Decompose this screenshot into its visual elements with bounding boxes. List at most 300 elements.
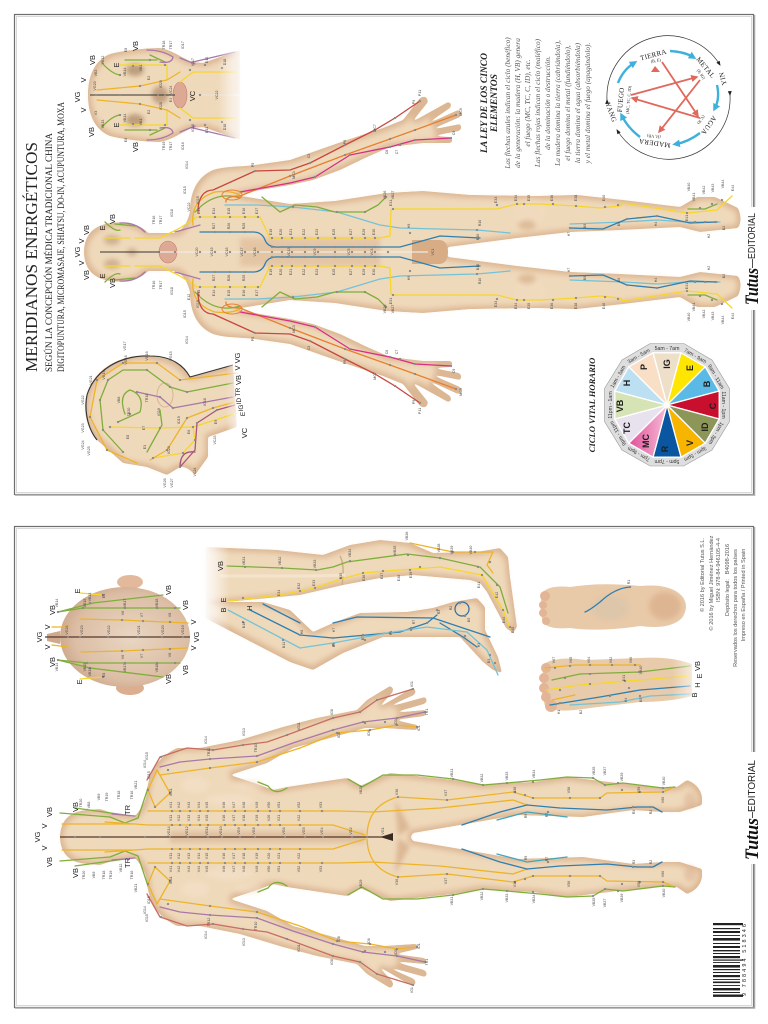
- labels: top view of head: V: [43, 644, 52, 650]
- labels: back body: V22: [297, 853, 301, 859]
- labels: back body: V13: [187, 815, 191, 821]
- labels: front head view: VC24: [169, 86, 173, 94]
- labels: back body: R2: [649, 860, 653, 864]
- labels: back body: V52: [297, 802, 301, 808]
- labels: front body: E33: [494, 301, 498, 307]
- top view of head, back sheet: [45, 575, 190, 695]
- labels: back body: VB34: [532, 770, 536, 778]
- labels: lateral head: E9: [214, 420, 218, 424]
- block: ley de los cinco elementos: ELEMENTOS: [490, 74, 500, 133]
- labels: back body: V60: [661, 797, 665, 803]
- labels: back body: IG11: [297, 722, 301, 730]
- labels: back body: IG11: [297, 944, 301, 952]
- labels: front head view: E8: [124, 48, 128, 52]
- labels: back body: TR: [123, 857, 132, 868]
- labels: back body: VB35: [592, 898, 596, 906]
- labels: lateral head: VG16: [145, 351, 149, 361]
- copyright text block: © 2016 by Editorial Tutus S.L.: [699, 538, 706, 612]
- labels: front body: C3: [307, 154, 311, 158]
- copyright text block: Impreso en España / Printed in Spain: [741, 549, 747, 641]
- labels: top view of head: VB17: [123, 664, 127, 672]
- labels: legs side view: E37: [380, 573, 384, 579]
- title: SEGÚN LA CONCEPCIÓN MÉDICA TRADICIONAL CHINA: [43, 133, 55, 372]
- labels: legs side view: E41: [477, 582, 481, 588]
- labels: legs side view: H3: [477, 643, 481, 647]
- labels: front body: IG18: [170, 209, 174, 217]
- labels: back body: R7: [545, 813, 549, 817]
- five elements cycle diagram: (H, VB): [646, 132, 661, 140]
- labels: back body: VB8: [87, 802, 91, 808]
- labels: front body: VC9: [313, 248, 317, 256]
- meridian lines: lower half of front: [105, 257, 732, 403]
- clock wheel: E: [685, 365, 695, 371]
- labels: front body: B10: [476, 234, 480, 240]
- labels: front body: E14: [212, 290, 216, 296]
- labels: front body: B2: [722, 226, 726, 230]
- clock wheel: IG: [662, 359, 672, 369]
- labels: back body: V14: [197, 815, 201, 821]
- five elements cycle diagram: [604, 36, 730, 159]
- labels: front body: H2: [707, 266, 711, 270]
- labels: front body: C7: [395, 350, 399, 354]
- labels: top view of head: [35, 585, 201, 685]
- labels: top view of head: VG: [35, 631, 44, 642]
- clock wheel: 7pm - 9pm: [627, 445, 651, 462]
- labels: back body: TR19: [109, 871, 113, 879]
- labels: front body: MC3: [292, 325, 296, 333]
- labels: front body: R27: [212, 275, 216, 281]
- labels: front head view: VB: [87, 127, 96, 137]
- labels: back body: ID6: [367, 730, 371, 736]
- labels: back body: [33, 681, 666, 993]
- labels: back body: V: [40, 823, 49, 829]
- labels: lateral head: E: [240, 411, 247, 416]
- labels: back body: V41: [169, 866, 173, 872]
- clock wheel: [604, 344, 730, 466]
- copyright text block: © 2016 by Miguel Jiménez Hernández: [708, 535, 715, 630]
- labels: front body: R26: [227, 223, 231, 229]
- labels: back body: V38: [513, 787, 517, 793]
- labels: front body: H9: [407, 276, 411, 280]
- labels: back body: V51: [277, 866, 281, 872]
- labels: legs side view: B5: [467, 618, 471, 622]
- labels: front body: E16: [242, 290, 246, 296]
- labels: legs side view: H4: [389, 631, 393, 635]
- clock wheel: V: [685, 440, 695, 446]
- labels: top view of head: VB15: [83, 599, 87, 607]
- clock wheel: P: [639, 364, 649, 370]
- labels: back body: TR1: [425, 959, 429, 965]
- labels: lateral head: TR: [235, 387, 242, 396]
- labels: back body: V13: [187, 853, 191, 859]
- labels: front body: E21: [289, 269, 293, 275]
- labels: front body: B2: [722, 274, 726, 278]
- labels: front head view: VC22: [215, 90, 219, 100]
- labels: front body: P5: [251, 163, 255, 167]
- labels: front body: C9: [452, 369, 456, 373]
- foot dorsal: [539, 654, 692, 712]
- labels: foot dorsal: [552, 657, 704, 714]
- labels: front body: E44: [731, 185, 735, 191]
- labels: back body: IG8: [330, 959, 334, 965]
- labels: back body: ID1: [417, 943, 421, 949]
- labels: legs side view: E36: [362, 575, 366, 581]
- labels: front body: E44: [731, 313, 735, 319]
- labels: lateral head: IG19: [157, 408, 161, 416]
- labels: back body: ID8: [337, 732, 341, 738]
- labels: foot dorsal: B2: [579, 710, 583, 714]
- labels: front body: E15: [227, 290, 231, 296]
- clock wheel: ID: [700, 422, 710, 432]
- logo: Tutus editorial top: EDITORIAL: [747, 213, 758, 259]
- labels: front body: P5: [251, 337, 255, 341]
- labels: back body: VB40: [662, 777, 666, 785]
- labels: front body: E22: [302, 229, 306, 235]
- labels: front body: VC17: [240, 248, 244, 256]
- labels: top view of head: V: [189, 645, 198, 651]
- labels: legs side view: H: [245, 605, 254, 611]
- labels: front body: MC7: [373, 372, 377, 380]
- labels: back body: V16: [222, 853, 226, 859]
- labels: foot dorsal: H4: [624, 698, 628, 702]
- labels: back body: V21: [277, 815, 281, 821]
- labels: lateral head: VC: [240, 427, 249, 438]
- labels: back body: V21: [277, 853, 281, 859]
- labels: legs side view: R2: [449, 606, 453, 610]
- labels: front body: E29: [362, 229, 366, 235]
- meridian lines: lower half of back: [60, 839, 675, 985]
- labels: back body: ID15: [147, 771, 151, 779]
- labels: front head view: VB14: [123, 68, 127, 76]
- labels: top view of head: VB: [48, 657, 57, 667]
- labels: front body: E35: [527, 303, 531, 309]
- labels: legs side view: E31: [277, 590, 281, 596]
- labels: front body: VB40: [687, 313, 691, 321]
- labels: foot dorsal: V65: [569, 657, 573, 663]
- labels: legs side view: R3: [437, 610, 441, 614]
- labels: foot dorsal: V64: [587, 657, 591, 663]
- labels: lateral head: VG24: [81, 440, 85, 450]
- labels: back body: VG1: [381, 827, 385, 835]
- labels: back body: IG8: [330, 709, 334, 715]
- labels: front body: H2: [707, 234, 711, 238]
- labels: front body: E27: [349, 229, 353, 235]
- labels: back body: V38: [513, 881, 517, 887]
- labels: front head view: VB14: [123, 114, 127, 122]
- labels: back body: VG2: [349, 827, 353, 835]
- labels: top view of head: VB13: [88, 593, 92, 601]
- labels: back body: V46: [222, 802, 226, 808]
- labels: lateral head: VG22: [81, 395, 85, 405]
- labels: back body: V41: [169, 802, 173, 808]
- labels: front body: MC7: [373, 124, 377, 132]
- labels: legs side view: VB38: [437, 544, 441, 552]
- logo: Tutus editorial bottom: EDITORIAL: [747, 760, 758, 812]
- labels: lateral head: VG23: [81, 423, 85, 433]
- labels: front body: E19: [269, 269, 273, 275]
- labels: front body: P6: [343, 140, 347, 144]
- labels: front body: R27: [212, 223, 216, 229]
- labels: back body: V53: [319, 802, 323, 808]
- labels: back body: ID8: [337, 936, 341, 942]
- labels: top view of head: VG22: [107, 625, 111, 635]
- lateral head view with meridians: [85, 356, 240, 475]
- clock wheel: 1am - 3am: [610, 365, 627, 389]
- labels: front body: MC3: [292, 171, 296, 179]
- labels: front body: TR16: [152, 281, 156, 289]
- labels: front body: E13: [197, 208, 201, 214]
- five elements cycle diagram: MADERA: [638, 137, 671, 149]
- labels: back body: TR16: [130, 871, 134, 879]
- labels: back body: VG4: [320, 827, 324, 835]
- block: ley de los cinco elementos: [480, 37, 592, 170]
- labels: front body: IG15: [196, 196, 200, 204]
- labels: back body: V19: [255, 815, 259, 821]
- labels: top view of head: V7: [140, 654, 144, 658]
- labels: front body: B6: [617, 278, 621, 282]
- labels: legs side view: VB33: [313, 560, 317, 568]
- labels: front body: C6: [385, 350, 389, 354]
- labels: front body: E40: [602, 195, 606, 201]
- labels: front body: E34: [514, 303, 518, 309]
- labels: top view of head: VB18: [155, 599, 159, 607]
- front head view with meridians: [88, 45, 243, 145]
- labels: front body: E17: [255, 290, 259, 296]
- labels: back body: V44: [197, 802, 201, 808]
- labels: front body: IG18: [170, 287, 174, 295]
- labels: front head view: E8: [124, 138, 128, 142]
- labels: back body: ID3: [394, 719, 398, 725]
- clock wheel: TC: [622, 422, 632, 434]
- labels: legs side view: VB31: [242, 557, 246, 565]
- clock wheel: B: [702, 380, 712, 387]
- labels: front body: E36: [550, 303, 554, 309]
- labels: legs side view: [216, 532, 515, 663]
- labels: lateral head: TR20: [127, 408, 131, 416]
- labels: back body: TR10: [254, 922, 258, 930]
- labels: front head view: [73, 41, 227, 152]
- clock wheel: R: [660, 445, 670, 452]
- labels: lateral head: VB: [234, 375, 243, 385]
- labels: back body: V42: [177, 866, 181, 872]
- labels: front body: IG14: [185, 161, 189, 169]
- clock wheel: VB: [615, 399, 625, 412]
- labels: back body: V16: [222, 815, 226, 821]
- labels: front body: P9: [412, 100, 416, 104]
- labels: front head view: E2: [147, 76, 151, 80]
- labels: back body: V48: [242, 802, 246, 808]
- labels: foot dorsal: H: [693, 682, 702, 688]
- labels: back body: ID3: [394, 949, 398, 955]
- labels: top view of head: V: [43, 624, 52, 630]
- labels: top view of head: VG23: [80, 625, 84, 635]
- labels: back body: V49: [255, 866, 259, 872]
- labels: back body: IG14: [143, 760, 147, 768]
- labels: back body: VB33: [505, 894, 509, 902]
- labels: top view of head: VG: [192, 631, 201, 642]
- labels: front body: VG: [73, 246, 82, 257]
- labels: legs side view: H8: [300, 630, 304, 634]
- labels: legs side view: VB40: [469, 546, 473, 554]
- labels: front body: E: [98, 225, 107, 231]
- labels: top view of head: V: [189, 619, 198, 625]
- labels: front body: E27: [349, 269, 353, 275]
- labels: front head view: TR17: [169, 41, 173, 49]
- labels: lateral head: E3: [143, 445, 147, 449]
- labels: back body: V18: [242, 815, 246, 821]
- labels: back body: VG8: [252, 827, 256, 835]
- labels: back body: V12: [177, 853, 181, 859]
- labels: lateral head: VG19: [102, 370, 106, 380]
- labels: front body: VC20: [195, 248, 199, 256]
- labels: front head view: V3: [94, 111, 98, 115]
- labels: front head view: IG20: [159, 102, 163, 110]
- labels: front body: VC16: [253, 248, 257, 256]
- labels: legs side view: E33: [312, 580, 316, 586]
- labels: back body: IG1: [410, 681, 414, 687]
- labels: back body: VG: [33, 831, 42, 842]
- labels: front head view: VG: [73, 91, 82, 102]
- labels: top view of head: VB: [164, 585, 173, 595]
- labels: front body: R10: [478, 220, 482, 226]
- labels: back body: IG1: [410, 987, 414, 993]
- labels: front body: E12: [187, 294, 191, 300]
- labels: back body: ID6: [367, 938, 371, 944]
- labels: front body: E33: [494, 197, 498, 203]
- labels: back body: VB39: [620, 894, 624, 902]
- labels: legs side view: VB34: [348, 549, 352, 557]
- logo: Tutus editorial top: Tutus: [742, 268, 763, 305]
- labels: front body: E34: [514, 195, 518, 201]
- five elements cycle diagram: YIN: [717, 71, 729, 86]
- clock wheel: 7am - 9am: [683, 348, 707, 365]
- labels: back body: VB9: [92, 872, 96, 878]
- foot sole: [539, 580, 686, 630]
- labels: front body: VB26: [383, 191, 387, 199]
- labels: top view of head: V6: [121, 611, 125, 615]
- labels: top view of head: E: [75, 679, 84, 685]
- labels: front body: E22: [302, 269, 306, 275]
- panel: front view sheet frame: [14, 14, 759, 495]
- labels: front head view: VB12: [101, 56, 105, 64]
- labels: front body: VB41: [692, 193, 696, 201]
- labels: back body: ID15: [147, 896, 151, 904]
- labels: front body: E41: [685, 215, 689, 221]
- labels: legs side view: E32: [297, 583, 301, 589]
- labels: back body: V20: [267, 853, 271, 859]
- labels: back body: V43: [187, 802, 191, 808]
- labels: back body: VG5: [302, 827, 306, 835]
- labels: back body: IG13: [242, 728, 246, 736]
- labels: front body: E16: [242, 208, 246, 214]
- labels: back body: V60: [661, 871, 665, 877]
- labels: lateral head: VG: [233, 352, 242, 363]
- title: DIGITOPUNTURA, MICROMASAJE, SHIATSU, DO-IN, ACUPUNTURA, MOXA: [56, 102, 66, 372]
- labels: front body: E41: [685, 283, 689, 289]
- front body figure: [84, 97, 740, 407]
- labels: back body: R3: [632, 810, 636, 814]
- labels: front body: E23: [315, 269, 319, 275]
- labels: back body: V11: [169, 853, 173, 859]
- labels: front body: E38: [574, 195, 578, 201]
- labels: lateral head: E7: [142, 426, 146, 430]
- labels: back body: TR: [123, 804, 132, 815]
- labels: front body: TR16: [152, 216, 156, 224]
- labels: foot dorsal: VB40: [639, 666, 643, 674]
- labels: top view of head: VB17: [123, 599, 127, 607]
- labels: back body: VB37: [603, 767, 607, 775]
- five elements cycle diagram: TIERRA: [639, 48, 668, 62]
- labels: back body: V56: [567, 787, 571, 793]
- labels: lateral head: ID19: [177, 416, 181, 424]
- labels: back body: TR18: [117, 791, 121, 799]
- labels: front head view: E: [112, 62, 121, 68]
- labels: back body: IG14: [204, 736, 208, 744]
- labels: back body: V17: [232, 815, 236, 821]
- labels: top view of head: VB15: [83, 663, 87, 671]
- labels: lateral head: VG17: [123, 341, 127, 351]
- labels: back body: ID11: [169, 876, 173, 884]
- labels: front body: VB43: [711, 312, 715, 320]
- labels: front head view: VC: [188, 90, 197, 101]
- labels: lateral head: V: [233, 365, 242, 371]
- labels: lateral head: VG26: [163, 478, 167, 488]
- labels: back body: VB31: [450, 769, 454, 777]
- labels: front body: C3: [307, 346, 311, 350]
- five elements cycle diagram: YANG: [604, 101, 618, 123]
- labels: front head view: VG20: [93, 81, 97, 91]
- labels: back body: VB: [71, 868, 80, 878]
- labels: top view of head: VB: [48, 605, 57, 615]
- labels: front body: E19: [269, 229, 273, 235]
- labels: back body: V15: [205, 815, 209, 821]
- labels: back body: R7: [545, 857, 549, 861]
- labels: legs side view: B11: [282, 642, 286, 648]
- labels: top view of head: VG20: [161, 625, 165, 635]
- labels: back body: VB: [45, 807, 54, 817]
- labels: front body: B10: [476, 264, 480, 270]
- labels: back body: VG11: [205, 827, 209, 835]
- labels: back body: VB32: [480, 774, 484, 782]
- labels: front body: E25: [332, 229, 336, 235]
- labels: front body: P11: [418, 90, 422, 96]
- labels: front body: E20: [279, 229, 283, 235]
- copyright text block: Depósito legal: B4098-2016: [725, 544, 731, 616]
- labels: back body: VB21: [134, 884, 138, 892]
- labels: front body: VB44: [721, 180, 725, 188]
- clock wheel: 3pm - 5pm: [683, 445, 707, 462]
- labels: legs side view: B3: [487, 659, 491, 663]
- labels: front body: MC9: [459, 108, 463, 116]
- logo: Tutus editorial bottom: Tutus: [742, 818, 763, 860]
- labels: front body: VC19: [210, 248, 214, 256]
- labels: foot dorsal: V62: [609, 657, 613, 663]
- labels: top view of head: VB: [181, 665, 190, 675]
- foot sole: R1: [627, 580, 631, 584]
- labels: back body: V52: [297, 866, 301, 872]
- labels: back body: R9: [524, 814, 528, 818]
- labels: back body: VB33: [505, 772, 509, 780]
- labels: back body: V59: [637, 787, 641, 793]
- labels: legs side view: VB: [216, 561, 225, 571]
- labels: back body: V50: [267, 802, 271, 808]
- meridian lines: upper half of front: [105, 101, 732, 247]
- title: MERIDIANOS ENERGÉTICOS: [22, 142, 41, 372]
- labels: top view of head: E8: [102, 594, 106, 598]
- labels: front body: P9: [412, 400, 416, 404]
- labels: lateral head: IG: [238, 405, 245, 411]
- labels: legs side view: E42: [495, 592, 499, 598]
